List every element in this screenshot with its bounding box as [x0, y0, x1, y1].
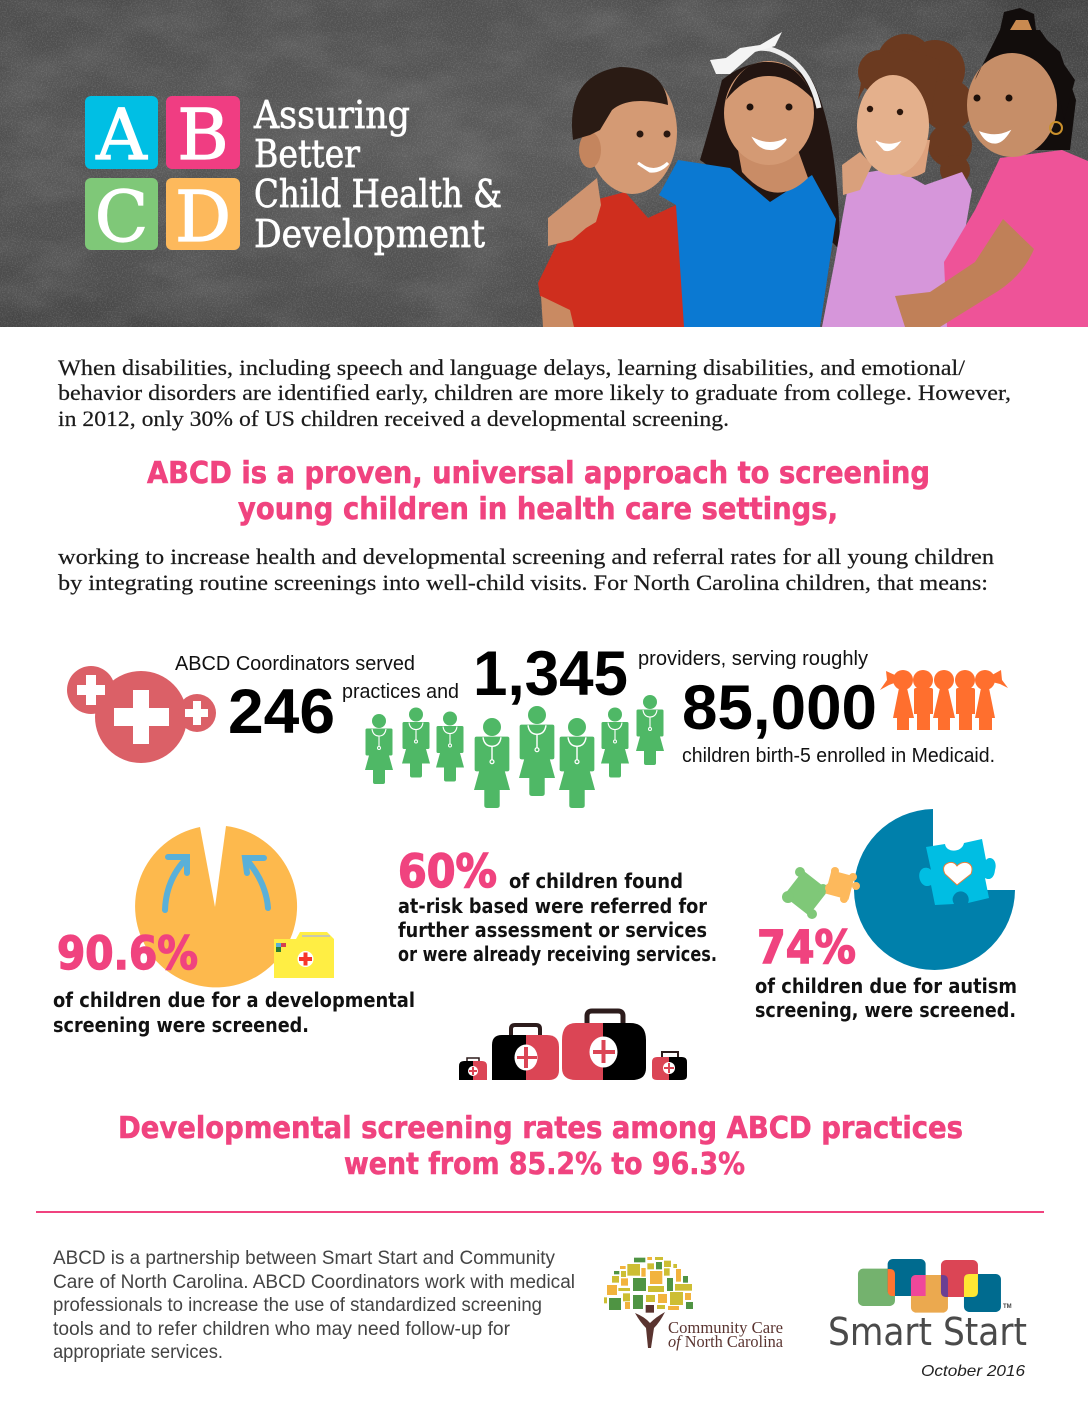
- logo: Smart Start: Smart Start: [828, 1310, 1027, 1354]
- child 2 white headband and bow: [728, 48, 819, 108]
- intro paragraph: When disabilities, including speech and language delays, learning disabilities, and emotional/: [58, 355, 966, 380]
- tree figure: [635, 1312, 665, 1348]
- logo: Community Care of North Carolina: of North Carolina: [668, 1332, 783, 1351]
- intro paragraph: behavior disorders are identified early, children are more likely to graduate from college. However,: [58, 380, 1011, 405]
- child 1 arm: [548, 178, 601, 246]
- stat: 60%: at-risk based were referred for: [398, 894, 707, 918]
- stat: 60%: further assessment or services: [398, 918, 707, 942]
- icon: medical bags: [459, 1011, 687, 1080]
- logo: Smart Start: [828, 1259, 1027, 1354]
- pink headline: proven approach: [147, 456, 930, 527]
- stat: coordinators, practices: [175, 653, 459, 747]
- pink headline: proven approach: young children in health care settings,: [238, 492, 838, 527]
- stat: 60%: or were already receiving services.: [398, 942, 717, 966]
- child 4 arm: [895, 219, 1034, 327]
- child 1 red shirt: [538, 192, 686, 327]
- stat: providers: providers, serving roughly: [638, 648, 868, 670]
- footer paragraph: Care of North Carolina. ABCD Coordinators work with medical: [53, 1272, 575, 1293]
- icon: green doctors: [365, 695, 664, 808]
- child 2 hair: [700, 62, 840, 250]
- logo: Community Care of North Carolina: [604, 1257, 783, 1351]
- paragraph: working to increase screening: by integrating routine screenings into well-child visits. For North Carolina children, that means:: [58, 570, 988, 595]
- intro paragraph: [58, 355, 1011, 431]
- ABCD logo blocks: [85, 94, 240, 258]
- date: October 2016: [921, 1363, 1025, 1380]
- stat: providers: 1,345: [473, 639, 628, 709]
- ABCD logo blocks: D: [175, 176, 231, 258]
- large bag: [562, 1011, 646, 1080]
- title: [253, 93, 502, 256]
- pink headline: screening rates: went from 85.2% to 96.3%: [344, 1147, 745, 1182]
- header banner: [0, 0, 1088, 327]
- footer paragraph: appropriate services.: [53, 1342, 223, 1363]
- ABCD logo blocks: A: [95, 94, 148, 176]
- logo: Smart Start: TM: [1003, 1304, 1012, 1310]
- pink headline: screening rates: [118, 1111, 963, 1182]
- child 2 blue shirt: [659, 160, 836, 327]
- stat: children: [682, 673, 995, 767]
- stat: 90.6%: [53, 927, 415, 1037]
- title: Child Health &: [254, 172, 502, 216]
- child 3 dress: [822, 168, 972, 327]
- stat: coordinators, practices: practices and: [342, 681, 459, 703]
- stat: 74%: [755, 921, 1017, 1022]
- child 4 hair back: [982, 8, 1076, 150]
- stat: coordinators, practices: ABCD Coordinators served: [175, 653, 415, 675]
- logo: Community Care of North Carolina: Community Care: [668, 1318, 783, 1337]
- child 4 pink shirt: [944, 150, 1088, 327]
- puzzle piece: orange: [825, 867, 860, 903]
- stat: coordinators, practices: 246: [228, 677, 335, 747]
- child 3 arm behind: [842, 152, 872, 195]
- photo: four smiling children: [538, 8, 1088, 327]
- intro paragraph: in 2012, only 30% of US children received a developmental screening.: [58, 406, 729, 431]
- stat: 60%: 60%: [398, 845, 497, 898]
- stat: 74%: 74%: [757, 921, 856, 974]
- ABCD logo blocks: B: [177, 94, 229, 176]
- pie chart: 90.6%: [135, 826, 297, 987]
- small bag left: [459, 1058, 487, 1080]
- stat: children: 85,000: [682, 673, 877, 743]
- icon: yellow medical folder: [274, 932, 334, 978]
- footer paragraph: professionals to increase the use of standardized screening: [53, 1295, 542, 1316]
- icon: orange children: [880, 670, 1008, 730]
- stat: children: children birth-5 enrolled in Medicaid.: [682, 745, 995, 767]
- pie chart: 74% with puzzle pieces: [782, 809, 1015, 970]
- child 1 face: [587, 70, 677, 194]
- ABCD logo blocks: C: [95, 176, 148, 258]
- puzzle piece: green: [782, 867, 828, 919]
- stat: 60%: [398, 845, 717, 966]
- stat: 60%: of children found: [509, 869, 683, 893]
- puzzle piece: blue: [919, 839, 996, 905]
- stat: 74%: screening, were screened.: [755, 998, 1016, 1022]
- child 2 face: [724, 61, 814, 165]
- stat: 90.6%: 90.6%: [57, 927, 198, 980]
- title: Better: [254, 132, 361, 176]
- pink headline: screening rates: Developmental screening rates among ABCD practices: [118, 1111, 963, 1146]
- arrows: [165, 857, 268, 910]
- paragraph: working to increase screening: [58, 544, 994, 595]
- small bag right: [652, 1052, 687, 1080]
- paragraph: working to increase screening: working to increase health and developmental screening and referral rates for all young children: [58, 544, 994, 569]
- child 3 curly hair: [858, 34, 974, 185]
- heart: [944, 862, 972, 885]
- stat: 90.6%: screening were screened.: [53, 1013, 309, 1037]
- icon: medical crosses: [67, 666, 216, 763]
- stat: 90.6%: of children due for a developmental: [53, 988, 415, 1012]
- footer paragraph: [53, 1248, 575, 1363]
- title: Development: [254, 212, 485, 256]
- title: Assuring: [253, 93, 410, 137]
- child 4 face: [967, 53, 1057, 157]
- stat: providers: [473, 639, 868, 709]
- footer paragraph: tools and to refer children who may need follow-up for: [53, 1319, 511, 1340]
- footer paragraph: ABCD is a partnership between Smart Start and Community: [53, 1248, 555, 1269]
- stat: 74%: of children due for autism: [755, 974, 1017, 998]
- medium bag: [492, 1025, 559, 1080]
- child 3 face: [857, 75, 929, 175]
- tree mosaic: [604, 1257, 693, 1313]
- pink headline: proven approach: ABCD is a proven, universal approach to screening: [147, 456, 930, 491]
